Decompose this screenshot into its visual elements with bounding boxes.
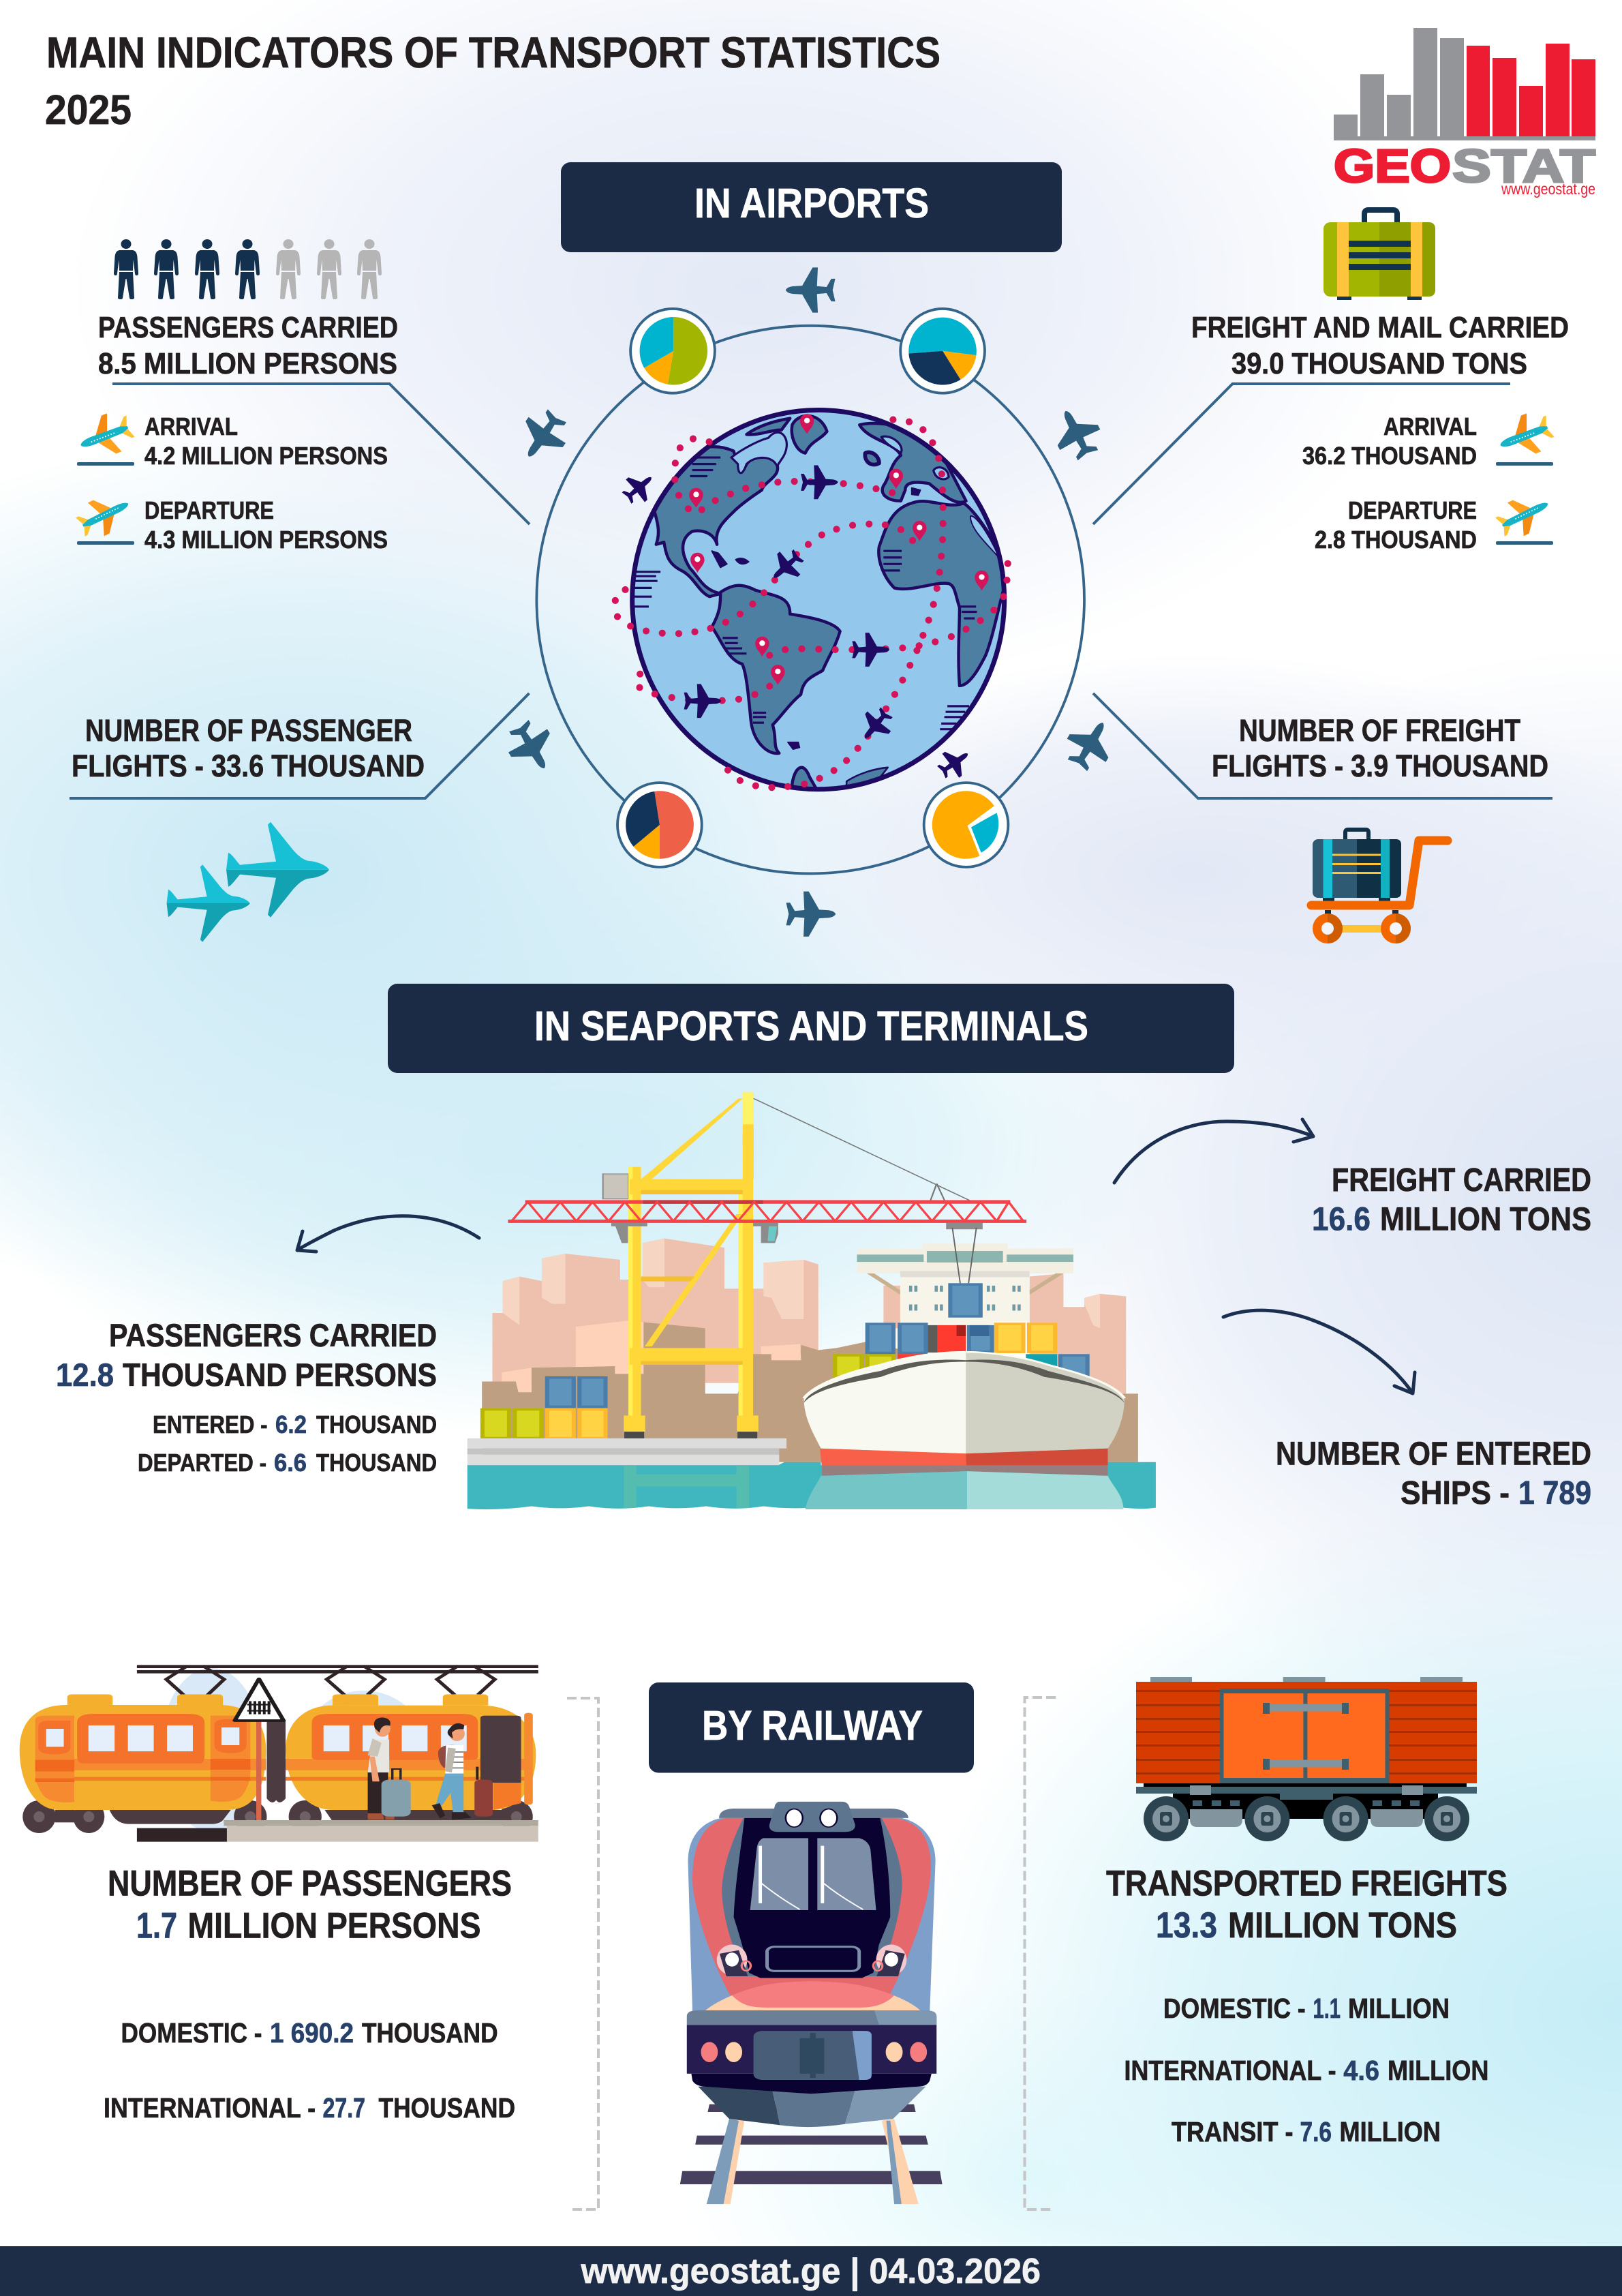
carriage 2 (286, 1694, 536, 1810)
nose (705, 1982, 920, 2010)
illustration: freight wagon (1136, 1677, 1477, 1841)
text: rail freight split: MILLION (1340, 2116, 1441, 2147)
passengers with luggage (368, 1717, 493, 1819)
text: freight flights: FLIGHTS - 3.9 THOUSAND (1212, 749, 1548, 783)
underline: freight departure (1496, 541, 1553, 545)
arrow: to freight (1114, 1119, 1313, 1183)
text: passenger flights (72, 713, 425, 783)
text: rail passengers: NUMBER OF PASSENGERS (108, 1864, 512, 1904)
text: rail freight split: MILLION (1348, 1993, 1450, 2024)
text: seaport passengers: 6.6 (274, 1449, 307, 1477)
text: rail freight: TRANSPORTED FREIGHTS (1106, 1864, 1508, 1904)
illustration: locomotive front (680, 1802, 943, 2204)
text: seaport passengers: 6.2 (275, 1410, 307, 1438)
text: passenger departure (144, 496, 388, 554)
leader line: freight (1093, 384, 1510, 524)
roof lamps (769, 1802, 855, 1832)
heading: in seaports and terminals (388, 984, 1234, 1073)
footer (0, 2246, 1622, 2296)
icon: freight departure plane (1492, 487, 1556, 544)
leader line: freight flights (1093, 693, 1552, 798)
text: seaport freight: MILLION TONS (1380, 1201, 1591, 1238)
icon: teal planes (166, 822, 329, 942)
text: seaport freight: 16.6 (1312, 1201, 1371, 1238)
water (468, 1462, 1156, 1509)
text: rail passenger split (104, 2017, 515, 2124)
text: freight departure (1315, 496, 1477, 554)
pie chart: bottom left (617, 783, 702, 867)
text: rail passenger split: 1 690.2 (270, 2017, 354, 2049)
text: entered ships: 1 789 (1518, 1475, 1591, 1511)
text: freight and mail carried: 39.0 THOUSAND TONS (1231, 347, 1527, 380)
text: rail passengers: MILLION PERSONS (188, 1906, 481, 1946)
text: rail freight split (1124, 1993, 1488, 2147)
cab windscreen (734, 1818, 890, 1978)
text: seaport passengers: PASSENGERS CARRIED (109, 1317, 437, 1353)
overhead wires (137, 1665, 538, 1695)
icon: freight arrival plane (1493, 407, 1557, 464)
pie chart: top left (630, 309, 715, 393)
text: rail passenger split: DOMESTIC - (121, 2017, 262, 2049)
text: seaport passengers: THOUSAND (316, 1449, 437, 1477)
tracks (680, 2104, 943, 2204)
text: rail freight (1106, 1864, 1508, 1946)
text: seaport passengers: THOUSAND PERSONS (123, 1357, 437, 1393)
icon: departure plane (72, 487, 136, 544)
text: seaport freight (1312, 1162, 1591, 1238)
flight routes (612, 416, 1011, 791)
quay (468, 1438, 786, 1465)
text: rail passengers (108, 1864, 512, 1946)
icon: passengers row (114, 239, 382, 299)
text: passengers carried (98, 311, 398, 380)
text: rail freight split: MILLION (1388, 2055, 1488, 2086)
leader line: passenger flights (70, 693, 529, 798)
text: rail freight split: 1.1 (1313, 1993, 1341, 2024)
text: freight and mail carried (1191, 311, 1569, 380)
text: rail freight split: 7.6 (1300, 2116, 1332, 2147)
heading: by railway (649, 1682, 974, 1772)
text: entered ships (1276, 1436, 1591, 1511)
illustration: port with crane and ship (468, 1092, 1156, 1509)
dashed bracket: left (567, 1698, 598, 2209)
text: passenger flights: NUMBER OF PASSENGER (85, 713, 412, 748)
logo: Geostat: www.geostat.ge (1501, 180, 1595, 198)
backdrop (160, 1668, 427, 1832)
text: rail freight split: INTERNATIONAL - (1124, 2055, 1336, 2086)
orbit planes (500, 267, 1122, 937)
text: rail freight: MILLION TONS (1228, 1905, 1457, 1946)
text: rail freight split: TRANSIT - (1172, 2116, 1294, 2147)
text: rail freight: 13.3 (1156, 1905, 1217, 1946)
lower skirt (698, 2087, 925, 2127)
wheels (22, 1800, 533, 1833)
title: MAIN INDICATORS OF TRANSPORT STATISTICS (46, 28, 940, 77)
text: freight and mail carried: FREIGHT AND MAIL CARRIED (1191, 311, 1569, 344)
text: passenger arrival: 4.2 MILLION PERSONS (144, 442, 388, 470)
warning sign (234, 1679, 284, 1820)
text: freight flights: NUMBER OF FREIGHT (1239, 713, 1520, 748)
heading: in airports: IN AIRPORTS (694, 180, 929, 226)
logo: Geostat: STAT (1452, 140, 1595, 192)
leader line: passengers (112, 384, 530, 524)
icon: green suitcase (1323, 210, 1435, 300)
text: freight arrival: 36.2 THOUSAND (1302, 442, 1477, 470)
text: entered ships: SHIPS - (1401, 1475, 1510, 1511)
dashed bracket: right (1025, 1697, 1056, 2209)
coupling (266, 1720, 286, 1802)
icon: arrival plane (74, 407, 138, 464)
arrow: to passengers (297, 1216, 479, 1252)
text: passenger flights: FLIGHTS - 33.6 THOUSAND (72, 749, 425, 783)
dock containers (483, 1378, 606, 1438)
globe diagram (500, 267, 1122, 937)
text: passengers carried: 8.5 MILLION PERSONS (98, 347, 397, 380)
platform (137, 1820, 538, 1842)
crane (603, 1092, 983, 1438)
ship hull (804, 1352, 1124, 1509)
headlights (717, 1945, 906, 1976)
text: rail freight split: 4.6 (1343, 2055, 1379, 2086)
text: freight flights (1212, 713, 1548, 783)
underline: arrival (77, 462, 134, 466)
text: rail passenger split: INTERNATIONAL - (104, 2092, 316, 2124)
heading: by railway: BY RAILWAY (702, 1702, 923, 1749)
text: passenger arrival (144, 412, 388, 470)
body (688, 1818, 936, 2011)
text: passenger departure: 4.3 MILLION PERSONS (144, 526, 388, 554)
text: freight arrival (1302, 412, 1477, 470)
pie chart: bottom right (924, 783, 1008, 867)
ship containers (835, 1324, 1088, 1376)
arrow: to ships (1223, 1310, 1415, 1393)
year: 2025 (45, 87, 132, 133)
text: passengers carried: PASSENGERS CARRIED (98, 311, 398, 344)
text: seaport passengers: THOUSAND (316, 1410, 437, 1438)
text: rail freight split: DOMESTIC - (1163, 1993, 1306, 2024)
text: freight arrival: ARRIVAL (1383, 412, 1477, 440)
red truss boom (508, 1200, 1026, 1223)
logo: Geostat: GEO (1334, 140, 1451, 192)
globe planes (617, 466, 976, 784)
text: freight departure: DEPARTURE (1348, 496, 1477, 524)
crane reflection (624, 1466, 749, 1508)
heading: in seaports and terminals: IN SEAPORTS AND TERMINALS (534, 1003, 1088, 1049)
city skyline (482, 1239, 1138, 1462)
text: passenger departure: DEPARTURE (144, 496, 274, 524)
underline: departure (77, 541, 134, 545)
text: rail passenger split: THOUSAND (379, 2092, 515, 2124)
pie chart: top right (900, 309, 985, 393)
text: rail passenger split: THOUSAND (362, 2017, 498, 2049)
hanging container (950, 1228, 981, 1316)
underline: freight arrival (1496, 462, 1553, 466)
logo: Geostat (1334, 28, 1595, 198)
text: seaport passengers (56, 1317, 437, 1477)
text: freight departure: 2.8 THOUSAND (1315, 526, 1477, 554)
carriage 1 (20, 1694, 266, 1810)
destination display (767, 1947, 859, 1971)
text: rail passengers: 1.7 (136, 1906, 177, 1946)
illustration: passenger train (20, 1665, 538, 1842)
text: rail passenger split: 27.7 (323, 2092, 365, 2124)
text: passenger arrival: ARRIVAL (144, 412, 238, 440)
text: seaport passengers: 12.8 (56, 1357, 114, 1393)
front bumper (687, 2010, 936, 2094)
text: seaport passengers: ENTERED - (153, 1410, 267, 1438)
text: seaport passengers: DEPARTED - (138, 1449, 266, 1477)
heading: in airports (561, 162, 1062, 252)
footer: www.geostat.ge | 04.03.2026 (581, 2252, 1041, 2291)
ship superstructure (857, 1243, 1073, 1325)
icon: luggage cart (1311, 830, 1448, 943)
orbit ring (536, 326, 1084, 873)
globe (632, 410, 1009, 792)
location pins (689, 414, 989, 685)
